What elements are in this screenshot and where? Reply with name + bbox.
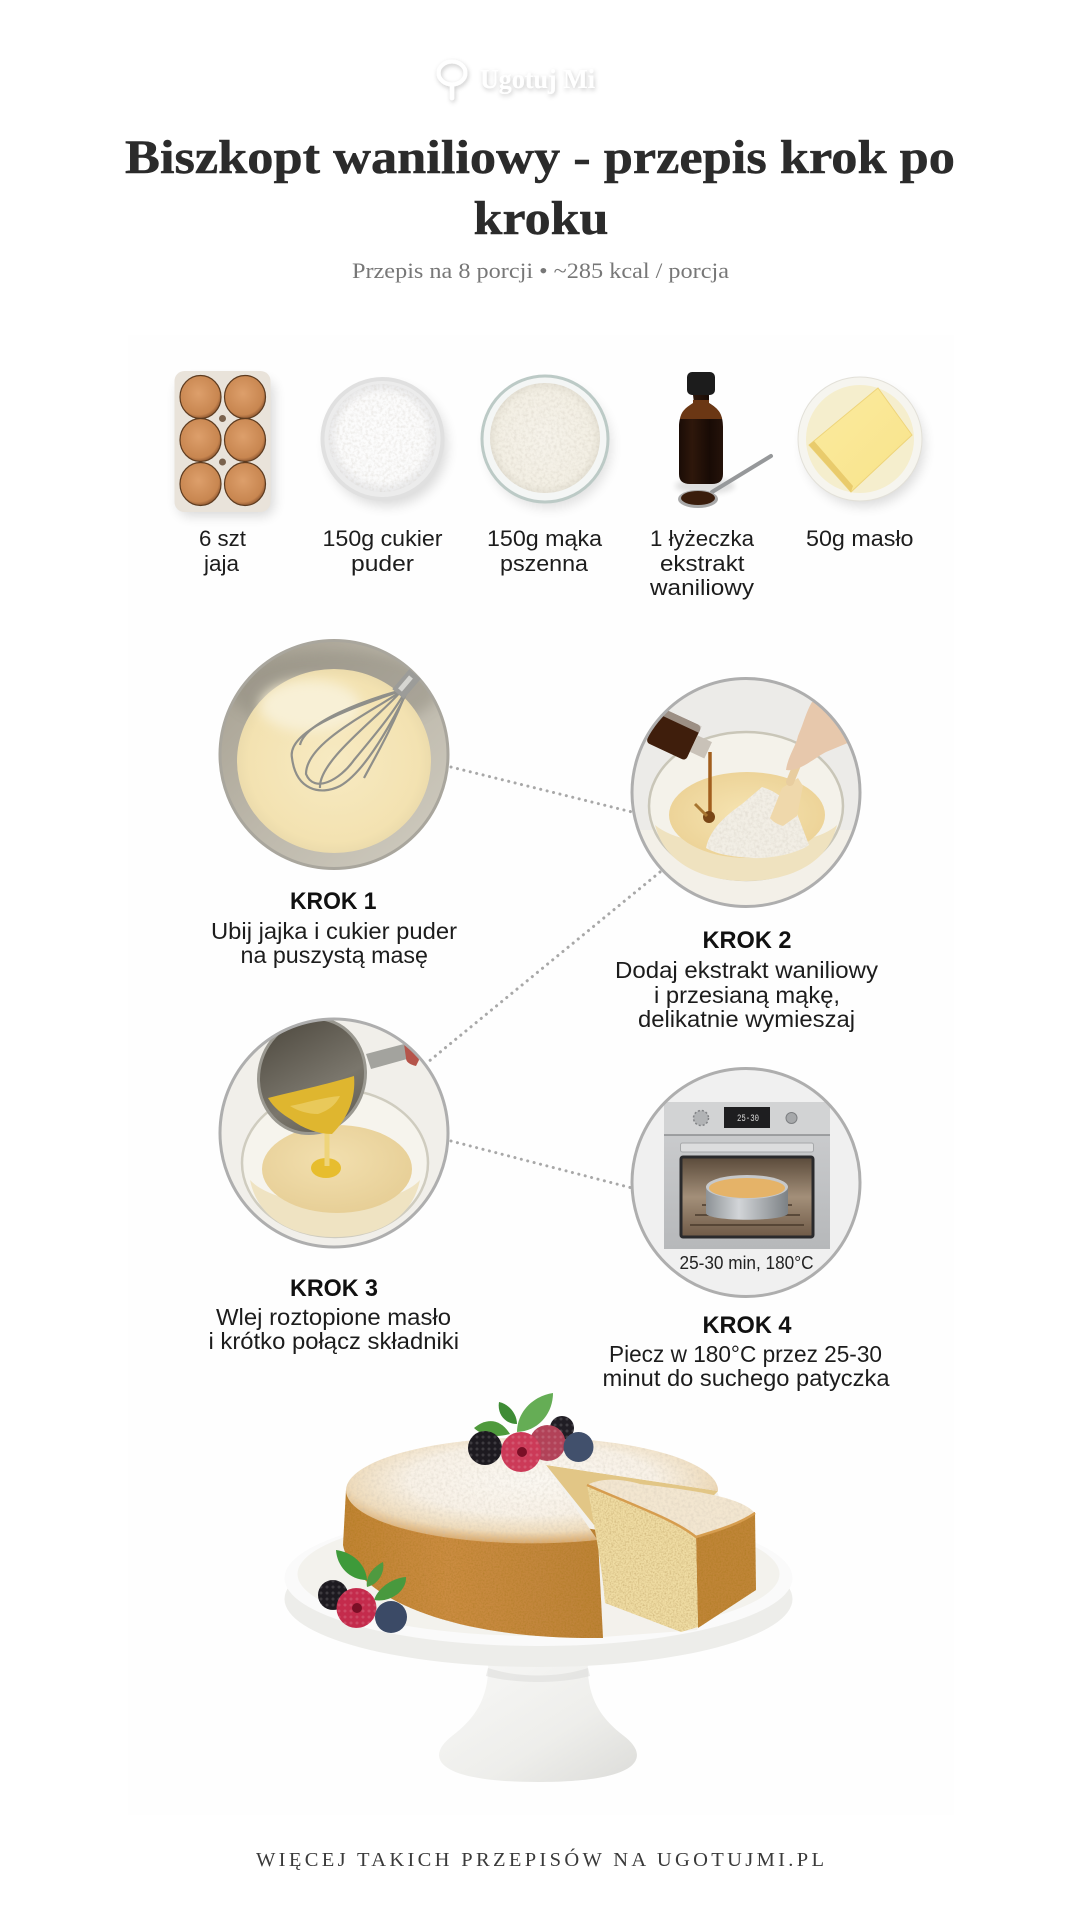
step text: Ubij jajka i cukier puder	[211, 918, 457, 944]
ingredient: vanilla extract and spoon	[675, 372, 771, 508]
step text: na puszystą masę	[240, 942, 428, 968]
step text	[602, 1312, 890, 1391]
label: eggs: jaja	[203, 551, 239, 576]
step text: KROK 2	[702, 927, 792, 954]
footer: WIĘCEJ TAKICH PRZEPISÓW NA UGOTUJMI.PL	[256, 1847, 824, 1871]
label: vanilla: ekstrakt	[660, 551, 745, 576]
label: vanilla: waniliowy	[649, 575, 755, 600]
stand	[439, 1660, 637, 1782]
label: sugar: puder	[351, 551, 415, 576]
arrow: step 3 to step 4	[451, 1141, 632, 1188]
title: Biszkopt waniliowy - przepis krok po	[125, 131, 955, 184]
berries and mint on plate	[318, 1550, 407, 1633]
label: sugar	[322, 526, 443, 576]
image: oven: 25-30	[737, 1114, 759, 1125]
step text: delikatnie wymieszaj	[638, 1006, 855, 1032]
title: kroku	[474, 192, 608, 245]
subtitle: Przepis na 8 porcji • ~285 kcal / porcja	[352, 258, 729, 283]
label: vanilla: 1 łyżeczka	[650, 526, 754, 551]
label: flour: 150g mąka	[487, 526, 602, 551]
ingredient: egg carton	[174, 371, 274, 516]
slice	[587, 1480, 756, 1632]
step text	[615, 927, 879, 1032]
powdered cake top	[346, 1437, 718, 1543]
gap and crumb wall	[546, 1465, 735, 1637]
arrow: step 2 to step 3	[428, 872, 660, 1062]
label: eggs: 6 szt	[199, 526, 247, 551]
step text: i krótko połącz składniki	[208, 1328, 459, 1354]
left cake body	[343, 1490, 603, 1638]
step text: Wlej roztopione masło	[216, 1304, 451, 1330]
label: butter: 50g masło	[806, 526, 914, 551]
ingredient: butter dish	[798, 377, 924, 506]
step text: minut do suchego patyczka	[602, 1365, 890, 1391]
arrow: step 1 to step 2	[451, 767, 632, 812]
image: adding vanilla and flour to glass bowl	[630, 678, 862, 910]
ingredient: powdered sugar bowl	[320, 377, 447, 506]
step text: i przesianą mąkę,	[654, 982, 840, 1008]
ingredient: flour bowl	[482, 376, 611, 508]
plate	[284, 1510, 792, 1667]
step text: Dodaj ekstrakt waniliowy	[615, 957, 879, 983]
title	[125, 131, 955, 245]
step text: Piecz w 180°C przez 25-30	[609, 1341, 882, 1367]
label: eggs	[199, 526, 247, 576]
step text: KROK 4	[702, 1312, 792, 1339]
panel: step 3	[208, 1004, 459, 1354]
panel: step 2	[615, 678, 879, 1032]
image: oven	[631, 1068, 861, 1298]
logo: Ugotuj Mi: Ugotuj Mi	[480, 64, 595, 94]
berries and mint on top	[468, 1393, 594, 1472]
image: oven: 25-30 min, 180°C	[680, 1252, 814, 1273]
image: whisked batter in steel bowl	[219, 640, 449, 870]
panel: step 4	[602, 1068, 890, 1391]
label: vanilla	[649, 526, 755, 600]
image: pouring melted butter	[219, 1004, 449, 1248]
step text	[208, 1275, 459, 1354]
label: sugar: 150g cukier	[322, 526, 443, 551]
image: sponge cake on a white stand	[284, 1393, 792, 1782]
step text	[211, 888, 457, 968]
panel: step 1	[211, 640, 457, 968]
cake	[343, 1437, 756, 1638]
step text: KROK 1	[290, 888, 376, 915]
step text: KROK 3	[290, 1275, 378, 1302]
label: flour	[487, 526, 602, 576]
label: flour: pszenna	[500, 551, 588, 576]
panel: ingredients	[174, 371, 924, 600]
logo: Ugotuj Mi	[438, 62, 595, 98]
